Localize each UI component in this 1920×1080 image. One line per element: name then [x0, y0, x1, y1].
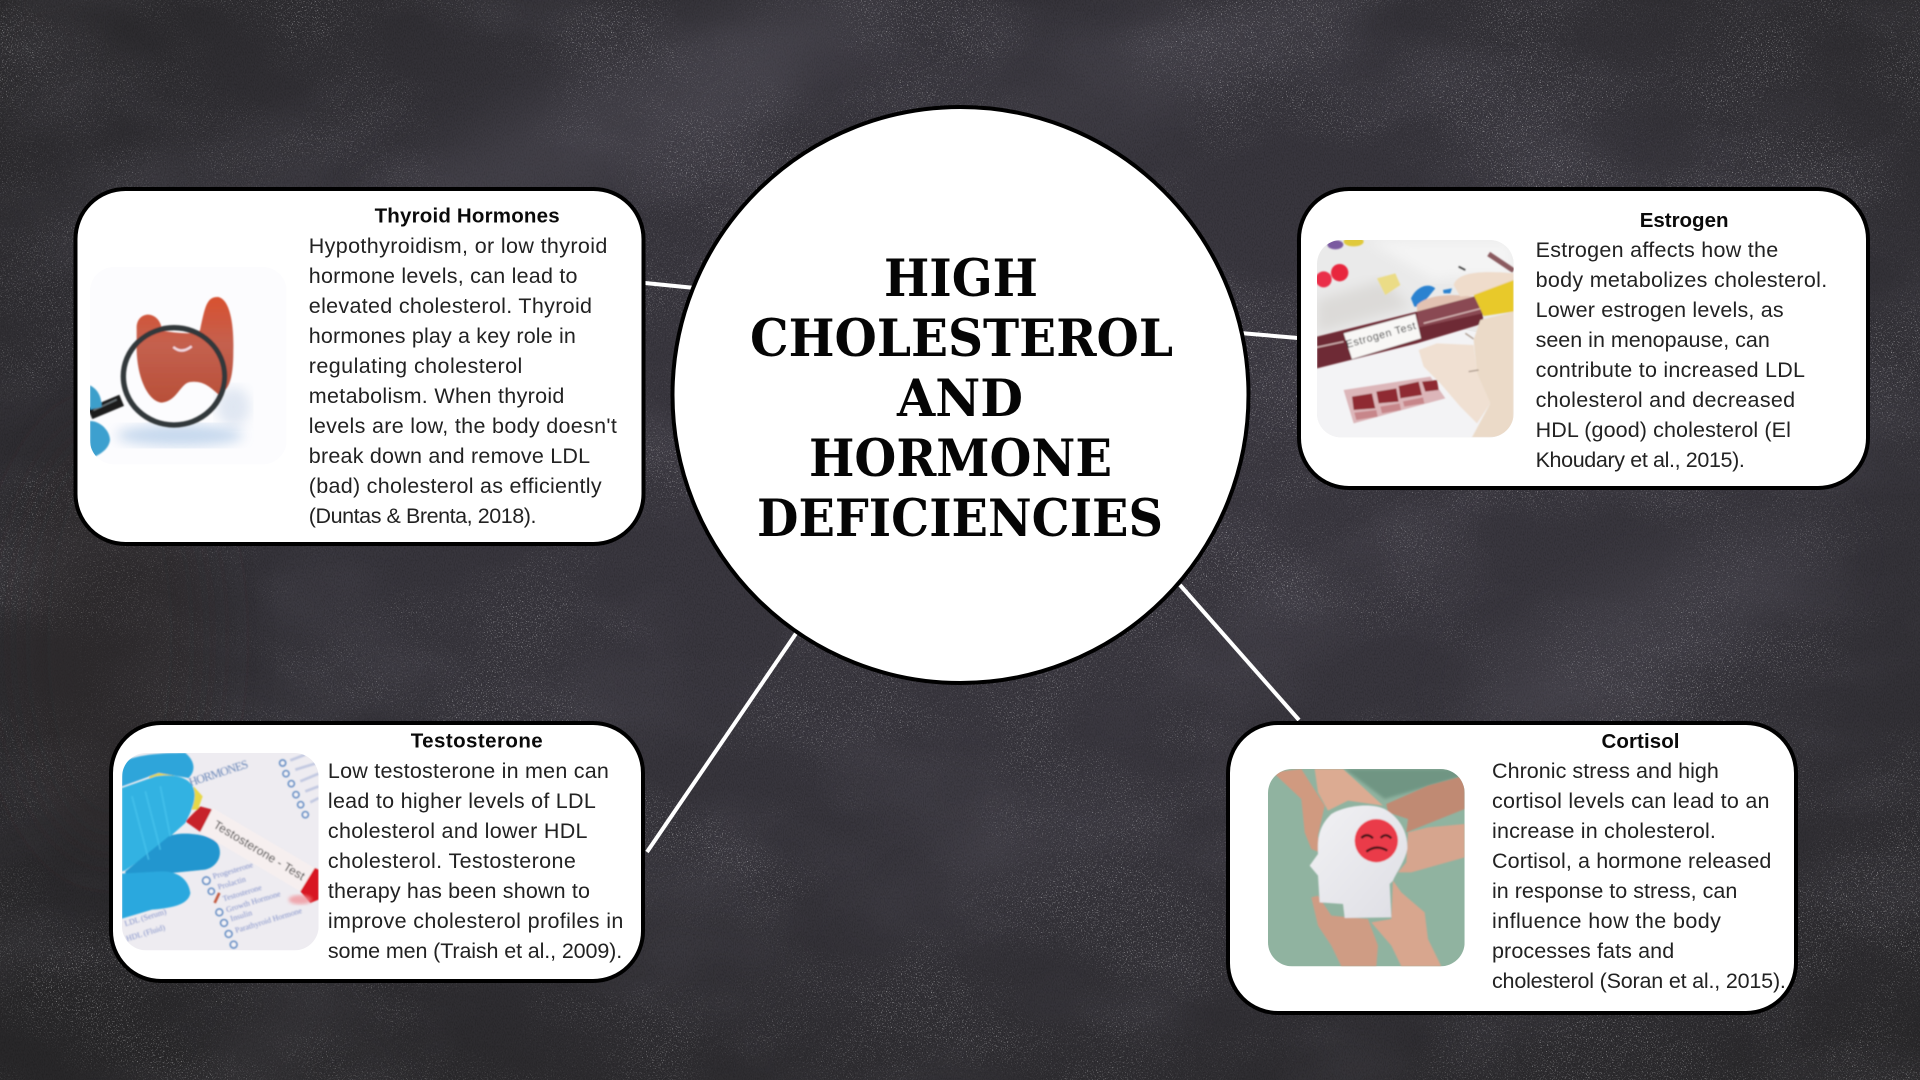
photo: testosterone test tube: LDL (Serum)	[123, 907, 168, 928]
body text: lead to higher levels of LDL	[328, 789, 596, 813]
photo: testosterone test tube: Testosterone	[222, 883, 263, 903]
body text: in response to stress, can	[1492, 879, 1737, 903]
title: HIGH	[884, 249, 1038, 309]
body text: improve cholesterol profiles in	[328, 909, 623, 933]
title: DEFICIENCIES	[757, 489, 1163, 549]
body text: break down and remove LDL	[309, 444, 590, 468]
photo: testosterone test tube: Parathyroid Hormone	[234, 906, 303, 935]
body text: cholesterol (Soran et al., 2015).	[1492, 969, 1786, 993]
title: HORMONE	[809, 429, 1112, 489]
photo: testosterone test tube: Progesterone	[212, 860, 255, 881]
title: CHOLESTEROL	[750, 309, 1173, 369]
heading: Estrogen	[1640, 209, 1728, 232]
body text: Khoudary et al., 2015).	[1536, 448, 1745, 472]
body text: regulating cholesterol	[309, 354, 522, 378]
body text	[309, 234, 617, 528]
photo: testosterone test tube: HDL (Fluid)	[125, 923, 166, 943]
body text: Estrogen affects how the	[1536, 238, 1778, 262]
photo: thyroid under magnifying glass	[90, 296, 254, 457]
body text: cholesterol. Testosterone	[328, 849, 576, 873]
body text: contribute to increased LDL	[1536, 358, 1805, 382]
body text: therapy has been shown to	[328, 879, 590, 903]
body text: elevated cholesterol. Thyroid	[309, 294, 592, 318]
body text	[1492, 759, 1786, 993]
body text: (Duntas & Brenta, 2018).	[309, 504, 536, 528]
body text	[1536, 238, 1827, 472]
body text: metabolism. When thyroid	[309, 384, 564, 408]
central circle with title	[672, 107, 1248, 683]
body text: processes fats and	[1492, 939, 1674, 963]
body text: (bad) cholesterol as efficiently	[309, 474, 602, 498]
heading: Testosterone	[411, 730, 543, 753]
photo: testosterone test tube: Testosterone - Test	[211, 818, 308, 883]
photo: testosterone test tube	[122, 753, 319, 950]
title	[750, 249, 1173, 549]
photo: testosterone test tube: HORMONES	[187, 757, 250, 789]
body text: Lower estrogen levels, as	[1536, 298, 1784, 322]
panel: estrogen	[1299, 189, 1868, 488]
body text: seen in menopause, can	[1536, 328, 1770, 352]
photo: testosterone test tube: Prolactin	[217, 875, 247, 892]
body text: influence how the body	[1492, 909, 1721, 933]
body text: body metabolizes cholesterol.	[1536, 268, 1827, 292]
photo: hands holding paper head with sad face	[1268, 769, 1465, 966]
title: AND	[896, 369, 1023, 429]
panel: thyroid hormones	[76, 189, 644, 544]
body text: HDL (good) cholesterol (El	[1536, 418, 1791, 442]
body text: cortisol levels can lead to an	[1492, 789, 1770, 813]
body text: hormones play a key role in	[309, 324, 576, 348]
body text	[328, 759, 623, 963]
body text: Cortisol, a hormone released	[1492, 849, 1771, 873]
panel: testosterone	[111, 723, 643, 981]
body text: some men (Traish et al., 2009).	[328, 939, 622, 963]
body text: cholesterol and decreased	[1536, 388, 1795, 412]
connector lines	[645, 283, 1299, 852]
panel: cortisol	[1228, 723, 1796, 1013]
body text: Chronic stress and high	[1492, 759, 1719, 783]
photo: testosterone test tube: Insulin	[229, 908, 253, 923]
photo: testosterone test tube: Growth Hormone	[225, 889, 282, 914]
body text: cholesterol and lower HDL	[328, 819, 588, 843]
photo: estrogen test tube: Estrogen Test	[1345, 320, 1417, 351]
body text: Hypothyroidism, or low thyroid	[309, 234, 607, 258]
body text: increase in cholesterol.	[1492, 819, 1716, 843]
heading: Thyroid Hormones	[375, 205, 560, 228]
body text: levels are low, the body doesn't	[309, 414, 617, 438]
photo: estrogen test tube	[1316, 237, 1514, 437]
heading: Cortisol	[1602, 730, 1680, 753]
body text: hormone levels, can lead to	[309, 264, 578, 288]
body text: Low testosterone in men can	[328, 759, 609, 783]
